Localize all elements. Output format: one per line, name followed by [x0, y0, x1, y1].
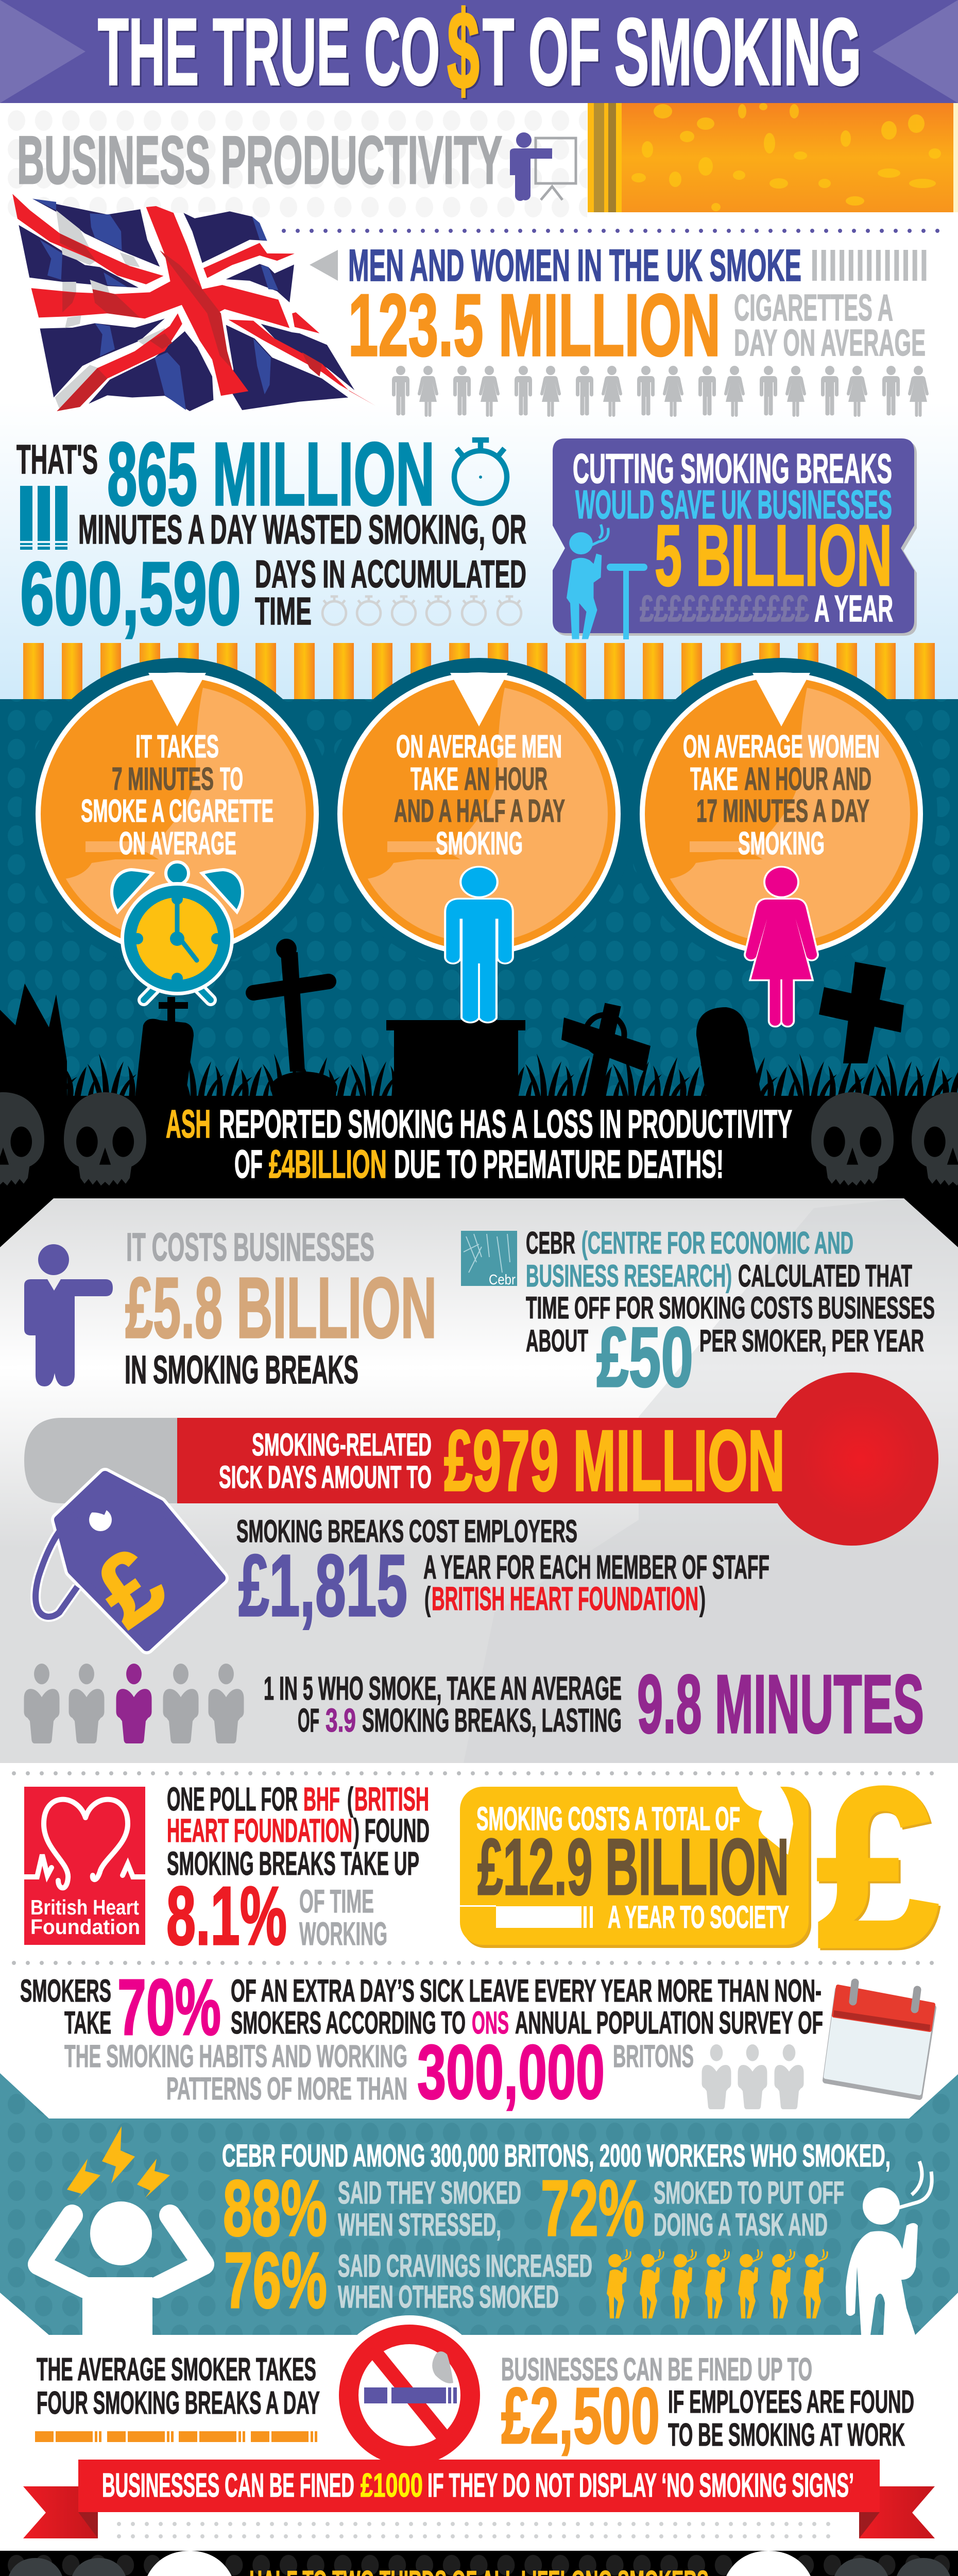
icon: large pound sign: £ [819, 1743, 940, 1996]
icons: dark skulls [6, 2558, 953, 2576]
text: smoking breaks cost employers: SMOKING BREAKS COST EMPLOYERS [236, 1514, 577, 1549]
text: of time: OF TIME [299, 1884, 374, 1920]
panel: lifelong smokers [0, 2551, 958, 2576]
text: working: WORKING [299, 1916, 387, 1952]
text: that's: THAT'S [16, 436, 98, 482]
icon row: four orange cigarettes [35, 2431, 317, 2442]
text: 7 minutes to: TO [220, 761, 243, 797]
text: 3.9 smoking breaks: SMOKING BREAKS, LASTING [362, 1702, 622, 1739]
panel: circle women [625, 658, 937, 970]
pound sign row: ££££££££££££ [640, 588, 809, 630]
icon: smoker at table [567, 524, 647, 639]
icon: lightning bolts [67, 2126, 170, 2198]
text: smoking-related: SMOKING-RELATED [252, 1427, 432, 1462]
graveyard silhouettes [0, 939, 958, 1105]
text: britons: BRITONS [613, 2039, 694, 2074]
stat: 88%: SAID THEY SMOKED [338, 2175, 521, 2210]
logo: Cebr: Cebr [489, 1272, 516, 1287]
title: THE TRUE CO [98, 0, 440, 105]
stat: 76%: 76% [224, 2236, 327, 2325]
text: british heart foundation: ( [424, 1580, 431, 1617]
text: smoking costs: SMOKING COSTS A TOTAL OF [476, 1800, 740, 1837]
text: it costs businesses: IT COSTS BUSINESSES [126, 1225, 374, 1269]
smoke [737, 1784, 793, 1855]
panel: minutes wasted [16, 423, 526, 643]
text: heart foundation found: HEART FOUNDATION [167, 1812, 352, 1849]
text: in smoking breaks: IN SMOKING BREAKS [125, 1348, 358, 1392]
icons: grey skulls [0, 1092, 958, 1185]
stat: 76% [224, 2236, 592, 2325]
panel: 12.9 billion [460, 1741, 940, 1996]
icon: pointing businessman [24, 1244, 113, 1386]
text: smoking: SMOKING [738, 826, 825, 861]
text: days in accumulated: DAYS IN ACCUMULATED [255, 552, 526, 596]
icon: stressed person [39, 2201, 203, 2335]
logo: Cebr [461, 1231, 517, 1287]
text: 1 in 5: 1 IN 5 WHO SMOKE, TAKE AN AVERAGE [264, 1670, 622, 1707]
text: on average: ON AVERAGE [119, 826, 236, 861]
stat: 72%: DOING A TASK AND [654, 2207, 828, 2242]
stat: 72% [541, 2164, 844, 2252]
big number: 865 million: 865 MILLION [107, 423, 435, 524]
icon: pink woman [746, 868, 817, 1026]
text: 3.9 smoking breaks: OF [298, 1702, 319, 1739]
icon: alarm clock [112, 862, 243, 1000]
stat: 88%: 88% [223, 2164, 327, 2252]
text: 3.9 smoking breaks [298, 1702, 622, 1739]
heading: business productivity: BUSINESS PRODUCTIVITY [17, 122, 502, 198]
icon: presenter at board [510, 132, 576, 201]
text: british heart foundation [424, 1580, 706, 1617]
icon: white skull left [141, 2551, 238, 2576]
panel: CEBR survey [0, 2073, 958, 2335]
panel: graveyard background [0, 699, 958, 1098]
icon: union jack flag [12, 194, 375, 411]
text: smoking habits: THE SMOKING HABITS AND WORKING [64, 2039, 407, 2074]
text: smoking: SMOKING [436, 826, 523, 861]
logo: British Heart Foundation [24, 1787, 145, 1945]
text: of 4 billion: OF [234, 1142, 263, 1187]
big number: 8.1%: 8.1% [166, 1870, 287, 1962]
icon row: men and women [392, 366, 929, 417]
icon: large pound sign: £ [817, 1741, 938, 1994]
icon: big cigarette with glowing tip [24, 1372, 938, 1546]
text: british heart foundation: BRITISH HEART FOUNDATION [432, 1580, 698, 1617]
panel: circle 7 minutes [21, 658, 333, 970]
text: one poll for bhf: ONE POLL FOR [167, 1781, 298, 1818]
panel: header banner [0, 0, 958, 112]
panel: sick leave 70 percent [20, 1963, 933, 2115]
big number: 5.8 billion: £5.8 BILLION [125, 1260, 437, 1356]
pointer arrow [310, 250, 338, 281]
icon row: 1 in 5 people [24, 1664, 244, 1743]
stat: 76%: WHEN OTHERS SMOKED [338, 2279, 559, 2314]
panel: circle men [323, 658, 635, 970]
big number: 300,000: 300,000 [417, 2029, 605, 2115]
big number: 2,500: £2,500 [501, 2371, 660, 2460]
text: of 4 billion: £4BILLION [269, 1142, 387, 1187]
text: smokers: SMOKERS [20, 1973, 111, 2008]
text: take an hour [410, 761, 548, 797]
text: ash reported: ASH [166, 1102, 211, 1146]
text: a year to society: A YEAR TO SOCIETY [608, 1900, 789, 1935]
panel: BHF poll [24, 1781, 430, 1962]
text: one poll for bhf: BRITISH [354, 1781, 429, 1818]
panel: grey business costs [0, 1198, 958, 1763]
text: average smoker: THE AVERAGE SMOKER TAKES [37, 2352, 316, 2387]
connectors between circles [314, 802, 644, 825]
logo: British Heart Foundation: Foundation [30, 1915, 140, 1939]
text: minutes a day: MINUTES A DAY WASTED SMOKING, OR [78, 506, 526, 552]
text: sick days: SICK DAYS AMOUNT TO [219, 1460, 432, 1495]
text: fines: BUSINESSES CAN BE FINED [102, 2466, 354, 2504]
stat: 76%: SAID CRAVINGS INCREASED [338, 2248, 592, 2283]
panel: cutting smoking breaks [553, 438, 917, 639]
icon: cigarette bars [812, 250, 930, 281]
panel: ASH premature deaths [0, 1092, 958, 1250]
text: smoking breaks take up: SMOKING BREAKS TAKE UP [167, 1845, 419, 1882]
dotted divider [284, 229, 947, 233]
logo: British Heart Foundation: British Heart [30, 1895, 139, 1919]
text: of 4 billion [234, 1142, 724, 1187]
stat: 88%: WHEN STRESSED, [338, 2207, 501, 2242]
text: four smoking breaks: FOUR SMOKING BREAKS A DAY [37, 2385, 320, 2421]
ribbon: no smoking signs [23, 2460, 935, 2538]
icon: three cigarettes [20, 486, 67, 550]
big number: 600,590: 600,590 [20, 543, 241, 643]
text: one poll for bhf: ( [347, 1781, 353, 1818]
text: patterns of more than: PATTERNS OF MORE THAN [166, 2071, 407, 2106]
text: take an hour and: TAKE [690, 761, 738, 797]
stat: 72%: 72% [541, 2164, 644, 2252]
text block: cebr calculation: BUSINESS RESEARCH) [526, 1259, 732, 1293]
icon: large white smoker [846, 2161, 932, 2335]
white patch below survey [0, 2335, 958, 2551]
row of cigarettes [23, 643, 935, 699]
text: smokers according to ons: SMOKERS ACCORDING TO [231, 2005, 466, 2040]
icon row: small stopwatches [322, 597, 521, 625]
text block: cebr calculation: ABOUT [526, 1324, 588, 1358]
text: heart foundation found: ) FOUND [353, 1812, 430, 1849]
big number: 123.5 million: 123.5 MILLION [348, 276, 721, 375]
text: 3.9 smoking breaks: 3.9 [326, 1702, 356, 1739]
text block: cebr calculation [526, 1226, 935, 1404]
text: take an hour and [690, 761, 871, 797]
panel: UK smoking statistic [310, 241, 930, 417]
text: fines [102, 2466, 854, 2504]
icon: price tag: £ [77, 1527, 184, 1648]
icon row: seven smokers [607, 2249, 827, 2318]
big number: 70%: 70% [117, 1963, 221, 2052]
text block: cebr calculation: £50 [596, 1310, 693, 1404]
text: it takes: IT TAKES [135, 729, 219, 765]
stat: 88% [223, 2164, 521, 2252]
text: smokers according to ons [231, 2005, 823, 2040]
text: on average men: ON AVERAGE MEN [396, 729, 562, 765]
text: take an hour: TAKE [410, 761, 458, 797]
icon row: three people [702, 2044, 803, 2109]
panel: smoking at work fines [35, 2315, 914, 2475]
text: smokers according to ons: ONS [472, 2005, 509, 2040]
text: and a half a day: AND A HALF A DAY [394, 793, 565, 829]
text block: cebr calculation: CEBR [526, 1226, 575, 1260]
text: smoke a cigarette: SMOKE A CIGARETTE [81, 793, 273, 829]
page background [0, 103, 958, 701]
text: take an hour: AN HOUR [464, 761, 548, 797]
icon: blue man [446, 868, 512, 1022]
icon: cigarette banner [588, 103, 958, 212]
text: take: TAKE [64, 2005, 111, 2040]
big number: 1,815: £1,815 [238, 1537, 407, 1635]
icon: price tag [36, 1476, 221, 1648]
icon: stopwatch [454, 440, 507, 503]
panel: business productivity [0, 103, 958, 222]
icon: calendar [826, 1982, 933, 2097]
text: time: TIME [255, 589, 312, 633]
text: british heart foundation: ) [699, 1580, 706, 1617]
white background [0, 1763, 958, 2124]
icon: no smoking sign [330, 2315, 489, 2475]
text: one poll for bhf: BHF [303, 1781, 340, 1818]
text: 7 minutes to: 7 MINUTES [112, 761, 214, 797]
filter band [460, 1905, 593, 1928]
text: a year: A YEAR [814, 588, 893, 630]
text: fines: £1000 [361, 2466, 423, 2504]
yellow cigarette box [463, 1790, 811, 1948]
icon: white skull right [720, 2551, 817, 2576]
